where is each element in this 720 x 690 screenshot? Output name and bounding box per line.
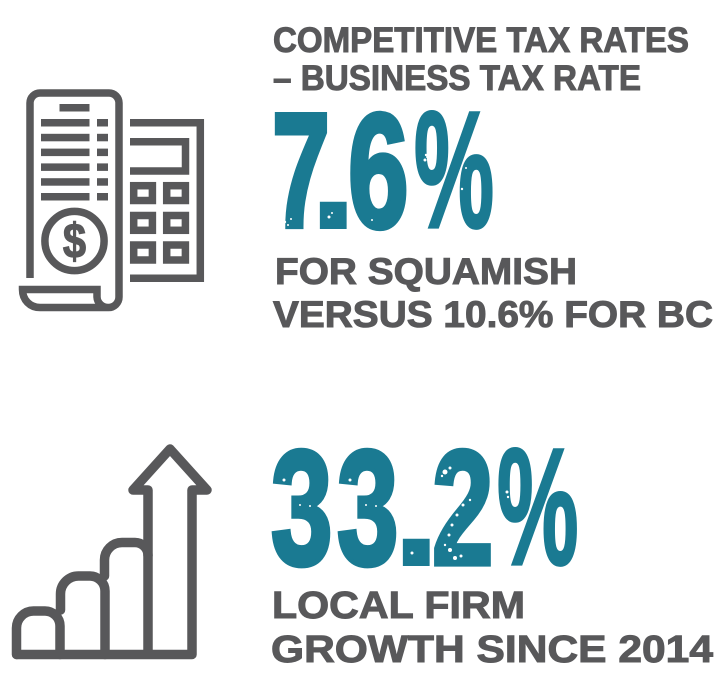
tall bar (104, 542, 148, 576)
heading: competitive tax rates: – BUSINESS TAX RATE (273, 59, 641, 98)
small bar (16, 611, 60, 654)
big number: 33.2%: 3 (337, 418, 399, 599)
heading: competitive tax rates (273, 21, 689, 98)
medium bar (60, 576, 105, 654)
receipt outline (22, 93, 119, 308)
text: for Squamish versus BC: VERSUS 10.6% FOR BC (273, 294, 713, 335)
big number: 7.6%: % (414, 78, 494, 263)
texture speckles (284, 154, 467, 226)
calculator buttons (134, 186, 185, 260)
big number: 33.2%: . (390, 400, 443, 605)
text: local firm growth since 2014 (271, 585, 713, 671)
big number: 7.6%: . (307, 63, 360, 268)
text: for Squamish versus BC: FOR SQUAMISH (275, 251, 577, 292)
big number: 7.6% (272, 63, 494, 268)
big number: 7.6%: 6 (348, 81, 409, 262)
text: for Squamish versus BC (273, 251, 713, 335)
calculator body (130, 123, 200, 278)
big number: 33.2%: 3 (271, 418, 333, 599)
texture speckles (282, 466, 509, 560)
heading: competitive tax rates: COMPETITIVE TAX RATES (273, 21, 689, 60)
big number: 7.6%: 7 (272, 79, 330, 261)
icon: receipt and calculator (22, 93, 200, 308)
receipt lines (41, 104, 108, 200)
big number: 33.2%: 2 (432, 418, 494, 599)
big number: 33.2% (271, 400, 578, 605)
calculator screen (130, 142, 186, 171)
big number: 33.2%: % (497, 415, 578, 600)
text: local firm growth since 2014: LOCAL FIRM (272, 585, 525, 627)
icon: growth bars with arrow (16, 449, 207, 654)
arrow (17, 449, 207, 654)
text: local firm growth since 2014: GROWTH SINCE 2014 (271, 629, 713, 671)
dollar coin: $ (63, 214, 86, 269)
dollar coin (45, 211, 104, 271)
